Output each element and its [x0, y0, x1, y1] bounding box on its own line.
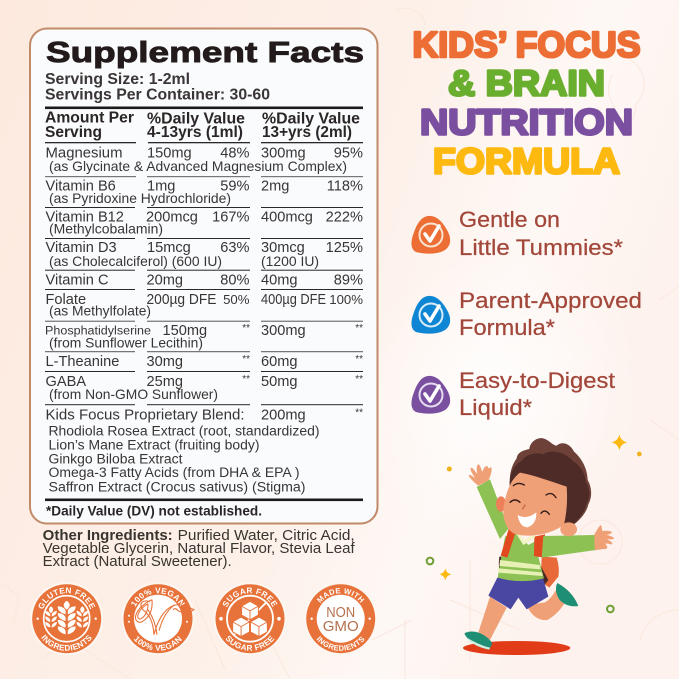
badge: sugar free — [216, 584, 284, 654]
row: L-Theanine — [46, 354, 363, 370]
icon: orange check — [411, 216, 450, 254]
left ear — [496, 496, 506, 512]
row: Vitamin B12: 222% — [326, 210, 363, 226]
icon: sugar cubes — [233, 601, 267, 637]
collar — [515, 529, 535, 545]
row: Magnesium: (as Glycinate & Advanced Magnesium Complex) — [49, 158, 347, 174]
row: Folate: (as Methylfolate) — [49, 302, 151, 318]
row: Vitamin B6 — [46, 179, 363, 206]
front leg — [478, 597, 507, 640]
row: Vitamin C: 80% — [220, 272, 250, 288]
row: GABA: 25mg — [146, 374, 183, 390]
row: L-Theanine: ** — [242, 354, 250, 365]
shadow — [463, 641, 570, 655]
other ingredients: Extract (Natural Sweetener). — [43, 554, 232, 570]
row: Vitamin D3 — [46, 240, 363, 269]
row: GABA: 50mg — [261, 374, 298, 390]
hair — [510, 438, 591, 524]
badge: vegan — [122, 582, 195, 655]
row: proprietary blend: Rhodiola Rosea Extract (root, standardized) — [48, 423, 320, 439]
back leg — [527, 590, 566, 620]
badge: non GMO: MADE WITH — [316, 588, 364, 603]
badge: sugar free: SUGAR FREE — [222, 588, 278, 608]
table header: %Daily Value — [147, 110, 245, 128]
row: proprietary blend: ** — [355, 408, 363, 418]
row: Vitamin B6: 1mg — [147, 179, 175, 195]
other ingredients: Vegetable Glycerin, Natural Flavor, Stevia Leaf — [43, 541, 356, 557]
row: Vitamin B6: Vitamin B6 — [46, 179, 116, 195]
outstretched arm — [542, 535, 596, 558]
benefit: gentle on little tummies: Gentle on — [459, 207, 560, 232]
right ear — [560, 522, 577, 536]
face — [503, 473, 567, 536]
badge: non GMO — [306, 584, 376, 654]
row: Phosphatidylserine: 300mg — [261, 323, 306, 339]
row: Folate: Folate — [46, 292, 86, 308]
row: GABA: ** — [355, 374, 363, 385]
front shoe — [464, 631, 492, 650]
outstretched hand — [594, 525, 614, 550]
row: Vitamin B12: 200mcg — [146, 210, 198, 226]
row: Folate — [46, 292, 363, 318]
row: proprietary blend: Lion’s Mane Extract (fruiting body) — [48, 437, 260, 453]
row: Folate: 50% — [223, 292, 250, 307]
icon: vegan V leaf — [135, 600, 194, 635]
row: Vitamin B6: 59% — [220, 179, 250, 195]
icon: wheat — [45, 601, 88, 634]
table header: %Daily Value — [262, 110, 360, 128]
table header: Amount Per — [45, 110, 134, 127]
other ingredients: Other Ingredients: — [43, 528, 173, 544]
raised arm — [477, 479, 509, 539]
row: proprietary blend: Ginkgo Biloba Extract — [48, 451, 183, 467]
sweater stripes — [498, 560, 543, 576]
icon: purple check — [411, 376, 450, 414]
row: proprietary blend — [46, 408, 363, 495]
heading — [412, 24, 640, 182]
row: Magnesium — [46, 146, 363, 174]
row: Folate: 100% — [329, 292, 363, 307]
table header: Serving — [45, 124, 102, 141]
row: Vitamin C — [46, 272, 363, 288]
row: Vitamin C: 40mg — [261, 272, 298, 288]
benefit: parent-approved formula — [411, 288, 642, 340]
other ingredients: Purified Water, Citric Acid, — [178, 528, 355, 544]
panel: supplement facts — [30, 28, 378, 524]
badge: vegan: 100% VEGAN — [134, 636, 182, 651]
row: Folate: 200µg DFE — [146, 292, 217, 308]
row: Vitamin C: 20mg — [146, 272, 183, 288]
row: GABA — [46, 374, 363, 402]
badge: gluten free: GLUTEN FREE — [38, 587, 96, 610]
row: Vitamin D3: 125% — [326, 240, 363, 256]
badge: non GMO: NON — [326, 605, 355, 621]
back shoe — [556, 583, 578, 606]
icon: blue check — [411, 296, 450, 334]
backpack — [541, 557, 559, 588]
heading: KIDS’ FOCUS — [412, 24, 640, 65]
row: proprietary blend: 200mg — [261, 408, 306, 424]
row: Magnesium: 150mg — [147, 146, 192, 162]
benefit: easy-to-digest liquid: Easy-to-Digest — [459, 368, 616, 393]
badge: gluten free: INGREDIENTS — [41, 634, 92, 651]
row: Vitamin B6: 118% — [327, 179, 363, 195]
row: Phosphatidylserine: (from Sunflower Lecithin) — [49, 334, 203, 350]
decorations — [427, 434, 642, 612]
row: Vitamin D3: Vitamin D3 — [46, 240, 117, 256]
other ingredients — [43, 528, 356, 570]
benefit: gentle on little tummies: Little Tummies* — [459, 235, 623, 260]
smile — [518, 512, 536, 527]
row: Magnesium: Magnesium — [46, 146, 122, 162]
row: L-Theanine: ** — [355, 354, 363, 365]
serving information: Servings Per Container: 30-60 — [45, 86, 270, 104]
heading: & BRAIN — [448, 62, 605, 104]
row: Vitamin B12: (Methylcobalamin) — [49, 220, 163, 236]
table header: 4-13yrs (1ml) — [147, 124, 243, 141]
row: proprietary blend: Kids Focus Proprietary Blend: — [46, 408, 245, 424]
row: Vitamin B12 — [46, 210, 363, 236]
row: GABA: GABA — [46, 374, 86, 390]
row: L-Theanine: L-Theanine — [46, 354, 119, 370]
row: GABA: (from Non-GMO Sunflower) — [49, 386, 218, 402]
table header: 13+yrs (2ml) — [262, 124, 352, 141]
raised hand — [469, 464, 492, 486]
row: Vitamin B12: 167% — [212, 210, 250, 226]
footnote: *Daily Value (DV) not established. — [46, 504, 262, 518]
benefit: parent-approved formula: Formula* — [459, 315, 555, 340]
row: Vitamin D3: (as Cholecalciferol) (600 IU) — [49, 253, 222, 269]
row: L-Theanine: 60mg — [261, 354, 298, 370]
row: Vitamin B12: Vitamin B12 — [46, 210, 124, 226]
torso — [498, 532, 544, 581]
row: Vitamin D3: 30mcg — [261, 240, 305, 256]
row: Phosphatidylserine: 150mg — [162, 323, 207, 339]
row: Vitamin B6: 2mg — [261, 179, 289, 195]
backpack straps — [501, 527, 545, 558]
benefit: gentle on little tummies — [411, 207, 623, 260]
row: Folate: 400µg DFE — [261, 292, 326, 308]
table header — [45, 110, 360, 141]
benefit: easy-to-digest liquid — [411, 368, 616, 420]
row: Vitamin C: 89% — [334, 272, 363, 288]
row: L-Theanine: 30mg — [146, 354, 183, 370]
row: Magnesium: 300mg — [261, 146, 306, 162]
row: Magnesium: 48% — [220, 146, 250, 162]
shorts — [488, 578, 548, 609]
row: proprietary blend: Saffron Extract (Crocus sativus) (Stigma) — [48, 479, 306, 495]
row: Vitamin B12: 400mcg — [261, 210, 313, 226]
row: Phosphatidylserine: ** — [242, 323, 250, 334]
row: GABA: ** — [242, 374, 250, 385]
heading: FORMULA — [433, 140, 620, 182]
row: Phosphatidylserine — [45, 323, 363, 350]
badge: non GMO: INGREDIENTS — [316, 636, 364, 651]
row: Vitamin D3: 63% — [220, 240, 250, 256]
illustration: happy boy running — [427, 434, 642, 655]
row: Vitamin D3: (1200 IU) — [261, 253, 319, 269]
row: Vitamin C: Vitamin C — [46, 272, 108, 288]
badge: sugar free: SUGAR FREE — [226, 636, 274, 651]
serving information: Serving Size: 1-2ml — [45, 71, 190, 88]
row: Magnesium: 95% — [334, 146, 363, 162]
row: Vitamin B6: (as Pyridoxine Hydrochloride) — [49, 190, 231, 206]
badge: vegan: 100% VEGAN — [131, 588, 185, 607]
row: proprietary blend: Omega-3 Fatty Acids (from DHA & EPA ) — [48, 465, 300, 481]
badge: non GMO: GMO — [323, 619, 359, 635]
title: Supplement Facts: Supplement Facts — [46, 37, 364, 69]
row: Phosphatidylserine: ** — [355, 323, 363, 334]
benefit: parent-approved formula: Parent-Approved — [459, 288, 642, 313]
heading: NUTRITION — [420, 102, 633, 142]
eyes and nose — [510, 483, 556, 514]
serving information — [45, 71, 270, 104]
row: Vitamin D3: 15mcg — [147, 240, 191, 256]
benefit: easy-to-digest liquid: Liquid* — [459, 395, 532, 420]
badge: gluten free — [30, 582, 103, 655]
row: Phosphatidylserine: Phosphatidylserine — [45, 326, 151, 338]
